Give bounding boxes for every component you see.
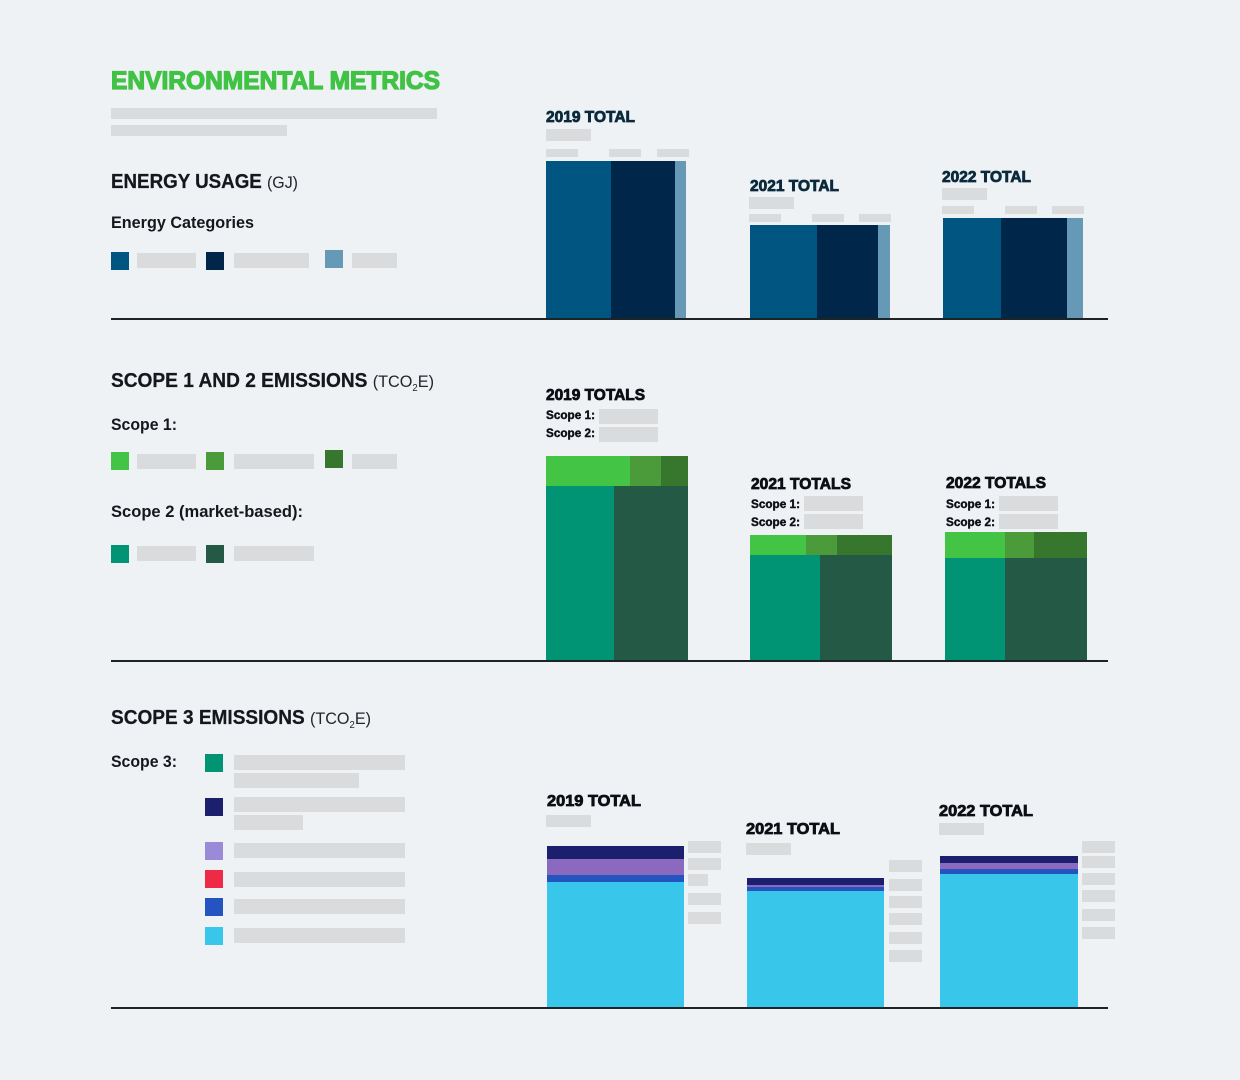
bar chart: scope 3 (546, 793, 1115, 1008)
bar label: 2019 total (546, 793, 641, 827)
bar: 2022 (940, 856, 1078, 1008)
bar: 2019 (546, 161, 686, 319)
heading: scope 3 emissions: SCOPE 3 EMISSIONS (TCO (111, 707, 352, 729)
panel: energy usage (111, 109, 1108, 320)
legend: scope 1 (111, 450, 397, 470)
bar label: 2019 total (546, 109, 689, 157)
legend: energy categories (111, 250, 397, 270)
bar label: 2021 totals: 2021 TOTALS (751, 476, 851, 493)
bar label: 2021 totals: Scope 1: (751, 497, 800, 511)
heading: scope 1 and 2 emissions: 2 (412, 383, 418, 394)
bar label: 2022 totals: Scope 1: (946, 497, 995, 511)
bar chart: energy usage (546, 109, 1084, 319)
bar label: 2019 total: 2019 TOTAL (547, 793, 641, 810)
bar label: 2019 totals: Scope 2: (546, 426, 595, 440)
panel: scope 3 emissions (111, 707, 1115, 1009)
bar label: 2021 totals: Scope 2: (751, 515, 800, 529)
heading: scope 3 emissions: E) (355, 709, 371, 728)
value labels: 2019 (688, 841, 721, 924)
subheading: energy categories: Energy Categories (111, 213, 254, 232)
bar: 2021 (750, 535, 892, 661)
title: ENVIRONMENTAL METRICS (111, 67, 440, 95)
bar: 2019 (546, 456, 688, 661)
bar: 2021 (750, 225, 890, 319)
bar label: 2022 total: 2022 TOTAL (939, 803, 1033, 820)
heading: scope 1 and 2 emissions: SCOPE 1 AND 2 EMISSIONS (TCO (111, 370, 414, 392)
bar: 2022 (943, 218, 1083, 319)
bar label: 2021 total (746, 821, 840, 855)
bar label: 2022 total (942, 169, 1084, 214)
bar label: 2019 totals: 2019 TOTALS (546, 387, 645, 404)
bar label: 2022 totals: 2022 TOTALS (946, 475, 1046, 492)
heading: scope 1 and 2 emissions: E) (418, 372, 434, 391)
bar label: 2022 total (939, 803, 1033, 835)
panel: scope 1 and 2 emissions (111, 370, 1108, 662)
legend: scope 3 (205, 754, 405, 945)
bar label: 2019 total: 2019 TOTAL (546, 109, 635, 126)
bar label: 2019 totals (546, 387, 658, 442)
bar label: 2019 totals: Scope 1: (546, 408, 595, 422)
bar label: 2021 totals (751, 476, 863, 529)
subheading: scope 3: Scope 3: (111, 752, 177, 771)
legend: scope 2 (111, 545, 314, 563)
bar: 2022 (945, 532, 1087, 661)
bar label: 2021 total (749, 178, 891, 222)
intro text placeholder (111, 108, 437, 136)
bar label: 2022 totals: Scope 2: (946, 515, 995, 529)
subheading: scope 1: Scope 1: (111, 415, 177, 434)
heading: scope 3 emissions: 2 (350, 720, 355, 731)
value labels: 2022 (1082, 841, 1115, 939)
bar: 2019 (547, 846, 684, 1008)
bar label: 2021 total: 2021 TOTAL (746, 821, 840, 838)
bar label: 2022 totals (946, 475, 1058, 529)
subheading: scope 2: Scope 2 (market-based): (111, 502, 303, 521)
value labels: 2021 (889, 860, 922, 962)
bar label: 2021 total: 2021 TOTAL (750, 178, 839, 195)
bar chart: scope 1 and 2 (546, 387, 1087, 661)
heading: energy usage: ENERGY USAGE (GJ) (111, 171, 298, 193)
bar label: 2022 total: 2022 TOTAL (942, 169, 1031, 186)
bar: 2021 (747, 878, 884, 1008)
